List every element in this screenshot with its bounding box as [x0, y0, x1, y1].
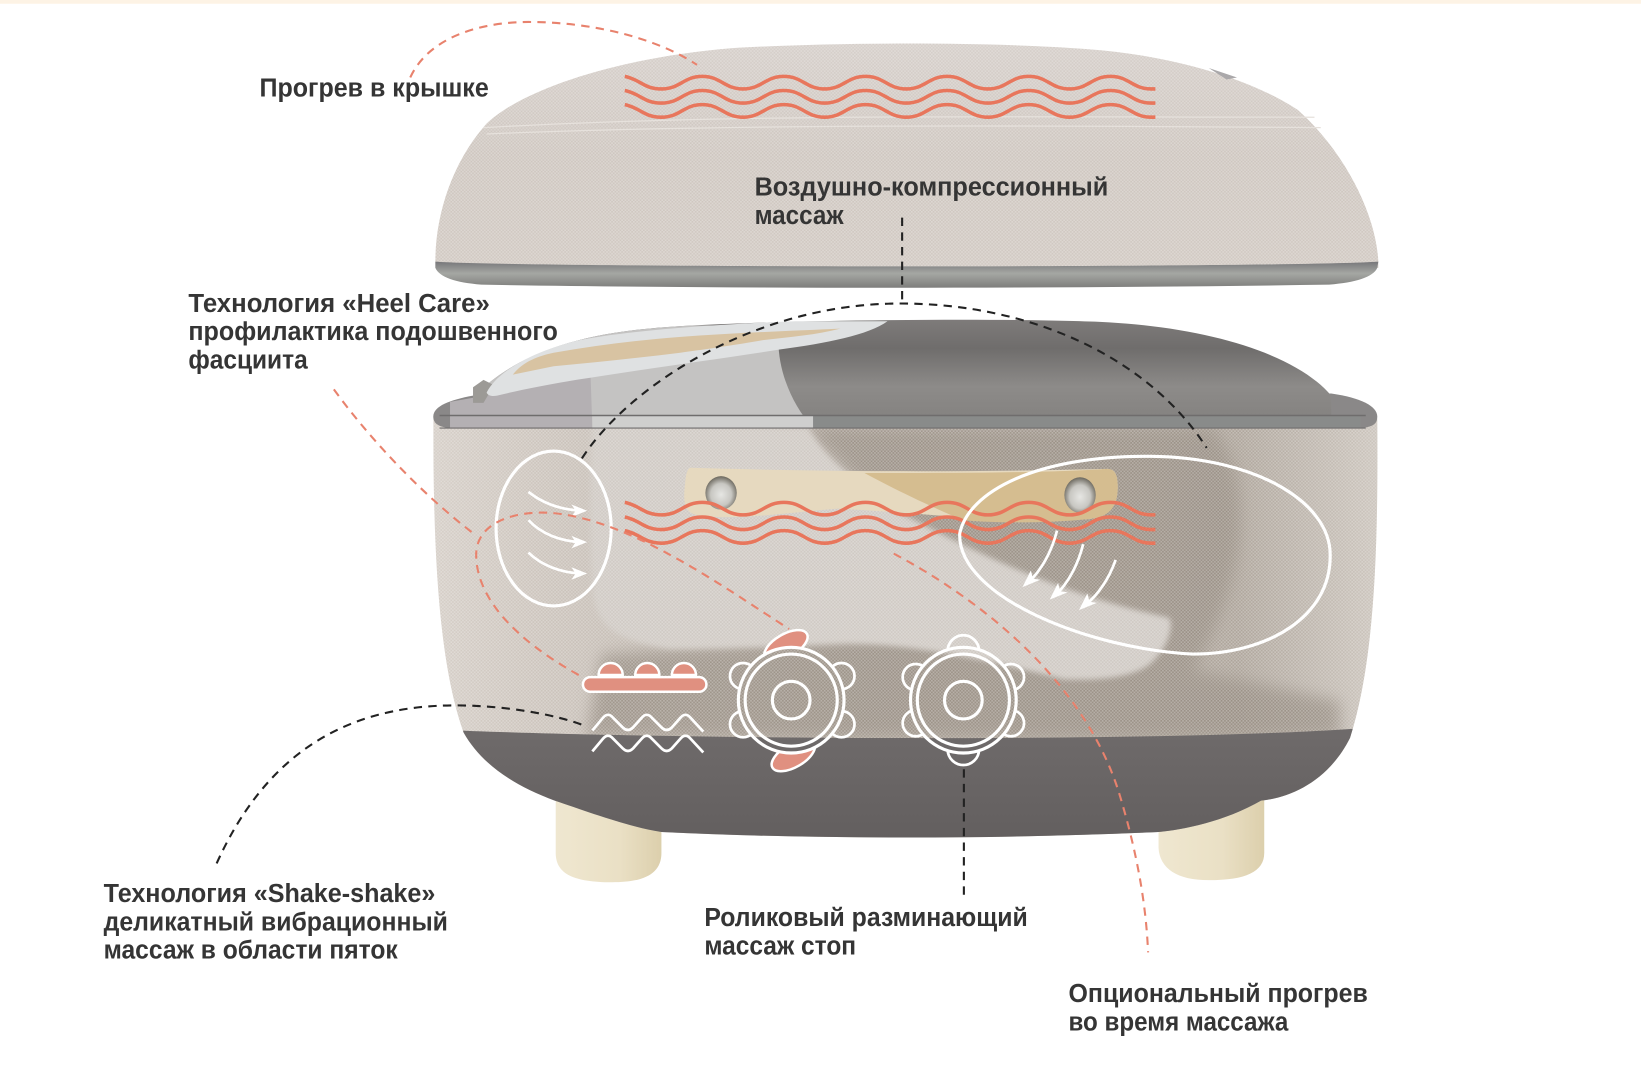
- label: heel care: профилактика подошвенного: [188, 318, 558, 346]
- icon: heel roller: [730, 624, 855, 778]
- massager body: [419, 320, 1402, 882]
- leader: shake-shake: [217, 705, 586, 863]
- heat waves in body: [625, 502, 1155, 543]
- translucent foot: [590, 424, 1171, 680]
- silver window frame: [487, 321, 887, 396]
- label: lid heating: Прогрев в крышке: [260, 74, 489, 102]
- icon: foot roller: [903, 635, 1024, 765]
- air compression zone: heel: [496, 451, 611, 606]
- label: air compression massage: массаж: [755, 202, 844, 230]
- arrows: [1022, 531, 1116, 610]
- leader: heel care: [334, 389, 789, 675]
- leader: lid heating: [410, 22, 697, 77]
- icon: vibration waves: [592, 715, 703, 752]
- translucent window part: [473, 325, 813, 428]
- air compression zone: foot: [960, 456, 1330, 654]
- label: roller massage: Роликовый разминающий: [704, 904, 1028, 932]
- heat waves in lid: [625, 76, 1155, 117]
- label: optional heating: во время массажа: [1069, 1008, 1289, 1036]
- label: heel care: [188, 290, 558, 374]
- leather handle: [684, 468, 1118, 522]
- label: optional heating: [1069, 980, 1368, 1036]
- massager lid: [435, 44, 1378, 288]
- label: shake-shake: деликатный вибрационный: [104, 908, 448, 936]
- label: roller massage: [704, 904, 1028, 960]
- rivets: [705, 476, 1096, 513]
- arrows: [529, 492, 587, 580]
- label: air compression massage: Воздушно-компрессионный: [755, 174, 1108, 202]
- top dome: [440, 320, 1366, 428]
- wooden legs: [556, 790, 1264, 882]
- leader: optional heating: [894, 554, 1148, 952]
- label: shake-shake: массаж в области пяток: [104, 937, 398, 965]
- label: heel care: фасциита: [188, 346, 308, 374]
- leader: air compression: [582, 218, 1207, 458]
- label: shake-shake: [104, 880, 448, 965]
- dark interior: [586, 427, 1340, 738]
- leather base: [462, 728, 1353, 838]
- top band: [0, 0, 1641, 4]
- label: air compression massage: [755, 174, 1108, 230]
- rim: [433, 394, 1377, 428]
- icon: heel care roller bar: [583, 663, 706, 692]
- leader: roller massage: [963, 769, 965, 898]
- label: shake-shake: Технология «Shake-shake»: [104, 880, 435, 908]
- label: heel care: Технология «Heel Care»: [188, 290, 490, 318]
- label: roller massage: массаж стоп: [704, 932, 856, 960]
- beige window interior: [513, 329, 840, 375]
- weave texture: [434, 420, 1378, 738]
- fabric shell: [419, 417, 1402, 848]
- label: optional heating: Опциональный прогрев: [1069, 980, 1368, 1008]
- coral lobes: [763, 628, 816, 772]
